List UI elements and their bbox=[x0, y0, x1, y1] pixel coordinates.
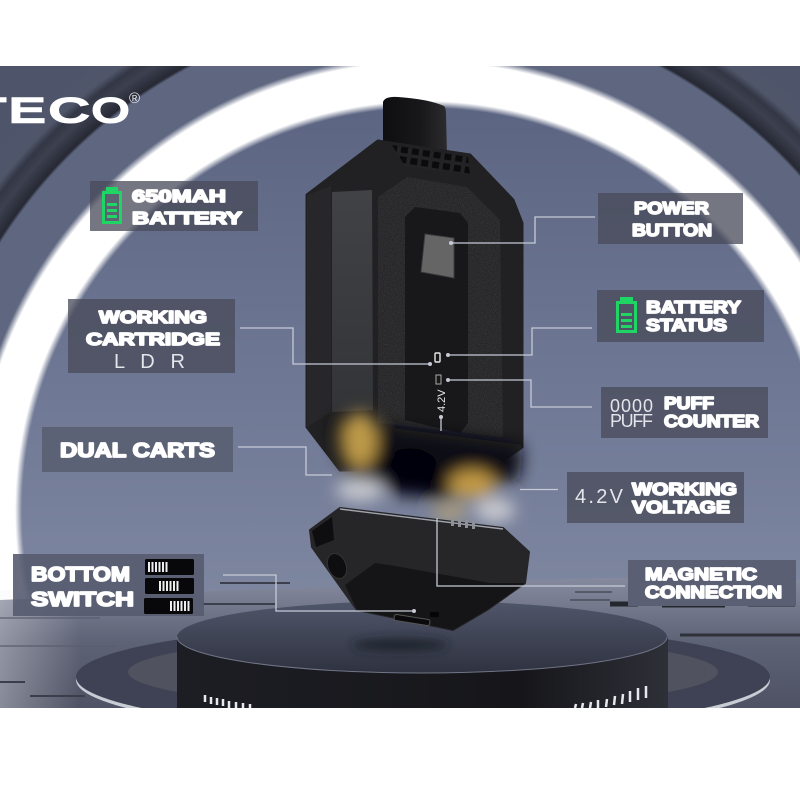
callout: battery status: BATTERY bbox=[646, 297, 741, 317]
callout: puff counter bbox=[601, 387, 768, 438]
callout: magnetic connection: MAGNETIC bbox=[645, 564, 757, 584]
platform outer ring bbox=[76, 640, 770, 708]
callout: dual carts bbox=[42, 427, 233, 472]
callout: working cartridge ldr: WORKING bbox=[99, 307, 207, 327]
callout: working voltage: VOLTAGE bbox=[632, 497, 730, 517]
callout: working cartridge ldr bbox=[68, 299, 235, 373]
callout: power button: POWER bbox=[634, 198, 709, 218]
device: main body bbox=[307, 97, 522, 470]
far left strip bbox=[307, 186, 331, 427]
icon: battery bbox=[102, 187, 122, 224]
battery glyph on screen bbox=[435, 353, 440, 362]
voltage text on screen: 4.2V bbox=[436, 389, 448, 412]
floor bbox=[0, 578, 800, 708]
icon: battery bbox=[616, 297, 637, 333]
blurred cartridges bbox=[330, 412, 522, 522]
logo: ® bbox=[129, 90, 140, 107]
callout: battery status: STATUS bbox=[646, 315, 727, 335]
puff glyph on screen bbox=[436, 375, 441, 384]
power button bbox=[421, 234, 454, 278]
callout: puff counter: PUFF bbox=[610, 411, 653, 431]
callout: power button bbox=[598, 193, 743, 244]
logo bbox=[0, 92, 140, 124]
callout: magnetic connection: CONNECTION bbox=[645, 582, 782, 602]
callout: puff counter: 0000 bbox=[610, 396, 653, 416]
logo: E bbox=[9, 92, 45, 130]
callout: working voltage bbox=[567, 472, 744, 523]
callout: battery status bbox=[597, 290, 764, 342]
callout: bottom switch: BOTTOM bbox=[31, 564, 130, 586]
screen panel bbox=[405, 207, 468, 433]
callout: working cartridge ldr: CARTRIDGE bbox=[86, 329, 220, 349]
callout: dual carts: DUAL CARTS bbox=[60, 440, 215, 462]
callout: bottom switch: SWITCH bbox=[31, 589, 134, 611]
callout: working cartridge ldr: L D R bbox=[114, 351, 185, 373]
top vent bbox=[392, 145, 470, 175]
callout: puff counter: COUNTER bbox=[664, 411, 759, 431]
callout: 650mah battery: BATTERY bbox=[132, 208, 242, 228]
mouthpiece bbox=[383, 97, 447, 155]
callout: working voltage: WORKING bbox=[632, 479, 737, 499]
callout: power button: BUTTON bbox=[632, 220, 712, 240]
callout: 650mah battery bbox=[90, 181, 258, 231]
connector lines bbox=[223, 217, 625, 613]
body shell bbox=[307, 141, 522, 470]
platform cylinder bbox=[177, 601, 668, 708]
callout: magnetic connection bbox=[628, 560, 796, 606]
device: magnetic base bbox=[310, 508, 529, 630]
callout: puff counter: PUFF bbox=[664, 393, 714, 413]
logo: O bbox=[92, 92, 129, 130]
leather panel bbox=[378, 177, 503, 437]
callout: working voltage: 4.2V bbox=[575, 486, 624, 508]
left side panel bbox=[332, 190, 373, 412]
icon: slider switches bbox=[144, 559, 194, 614]
callout: bottom switch bbox=[13, 554, 204, 616]
logo: C bbox=[49, 92, 89, 130]
callout: 650mah battery: 650MAH bbox=[132, 186, 226, 206]
